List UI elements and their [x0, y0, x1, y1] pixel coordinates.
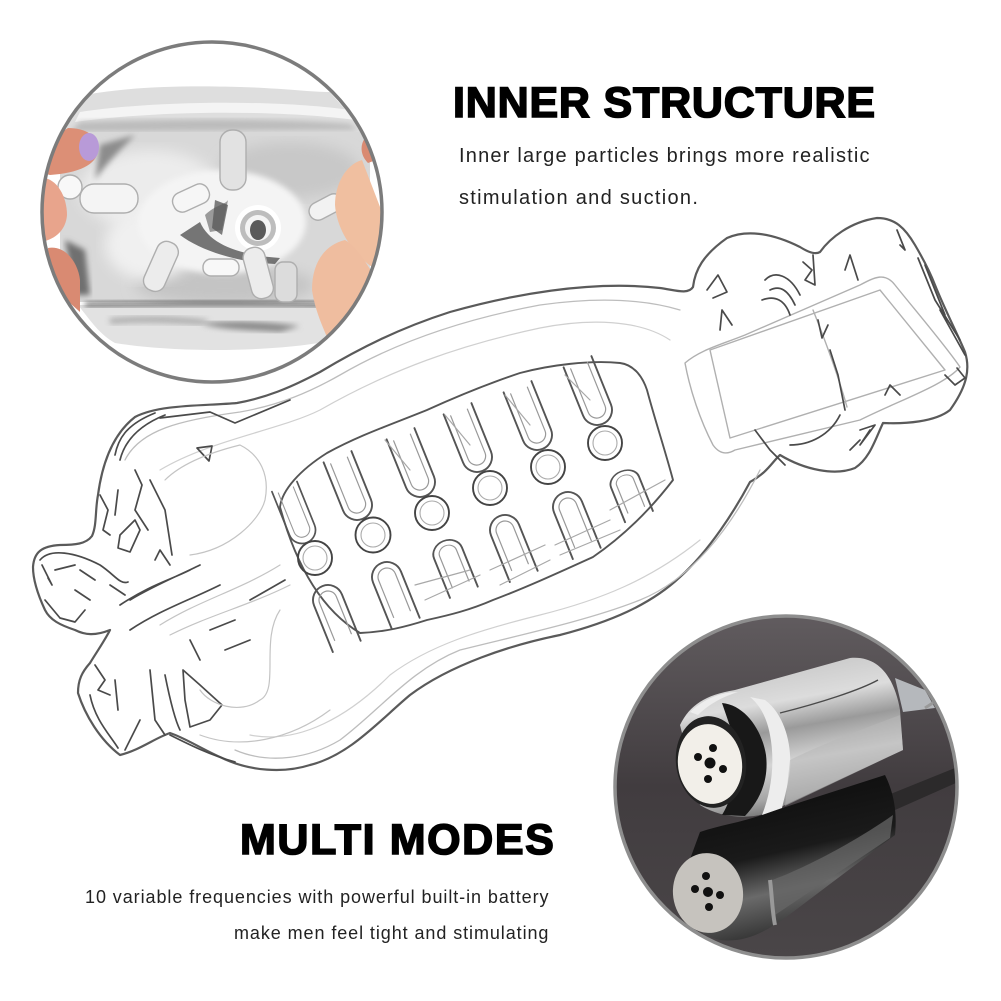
text: inner structure description line 2: stimulation and suction.	[459, 187, 699, 209]
inner chamber outline	[280, 362, 673, 633]
end cap dark texture	[707, 230, 965, 465]
right fingers	[312, 138, 385, 337]
cable	[895, 678, 935, 712]
left fingers	[44, 128, 96, 312]
top row capsules	[272, 356, 617, 548]
upper rim	[65, 86, 360, 132]
opening dark texture	[40, 400, 290, 762]
text: inner structure description: Inner large particles brings more realistic	[459, 145, 871, 167]
inset 2 border	[615, 616, 957, 958]
reflected bullet	[668, 775, 896, 940]
lower rim	[78, 300, 355, 350]
end cap blocks	[685, 277, 960, 453]
text: multi modes description line 2: make men feel tight and stimulating	[234, 923, 549, 943]
reflected cable	[892, 768, 955, 810]
painted nail	[79, 133, 99, 161]
metal bullet	[670, 658, 903, 817]
opening soft contours	[160, 445, 330, 742]
text: multi modes description: 10 variable frequencies with powerful built-in battery	[85, 887, 549, 907]
product outer outline	[33, 218, 967, 770]
soft inner contour	[125, 300, 760, 758]
inset 1 border	[42, 42, 382, 382]
middle chamber	[60, 132, 370, 305]
translucent nubs	[58, 130, 346, 302]
bottom row capsules	[308, 466, 653, 652]
heading: multi modes: MULTI MODES	[240, 816, 555, 864]
round bumps	[298, 426, 622, 575]
heading: inner structure: INNER STRUCTURE	[453, 79, 876, 127]
chamber ribs	[385, 375, 665, 600]
central lens	[138, 170, 306, 274]
